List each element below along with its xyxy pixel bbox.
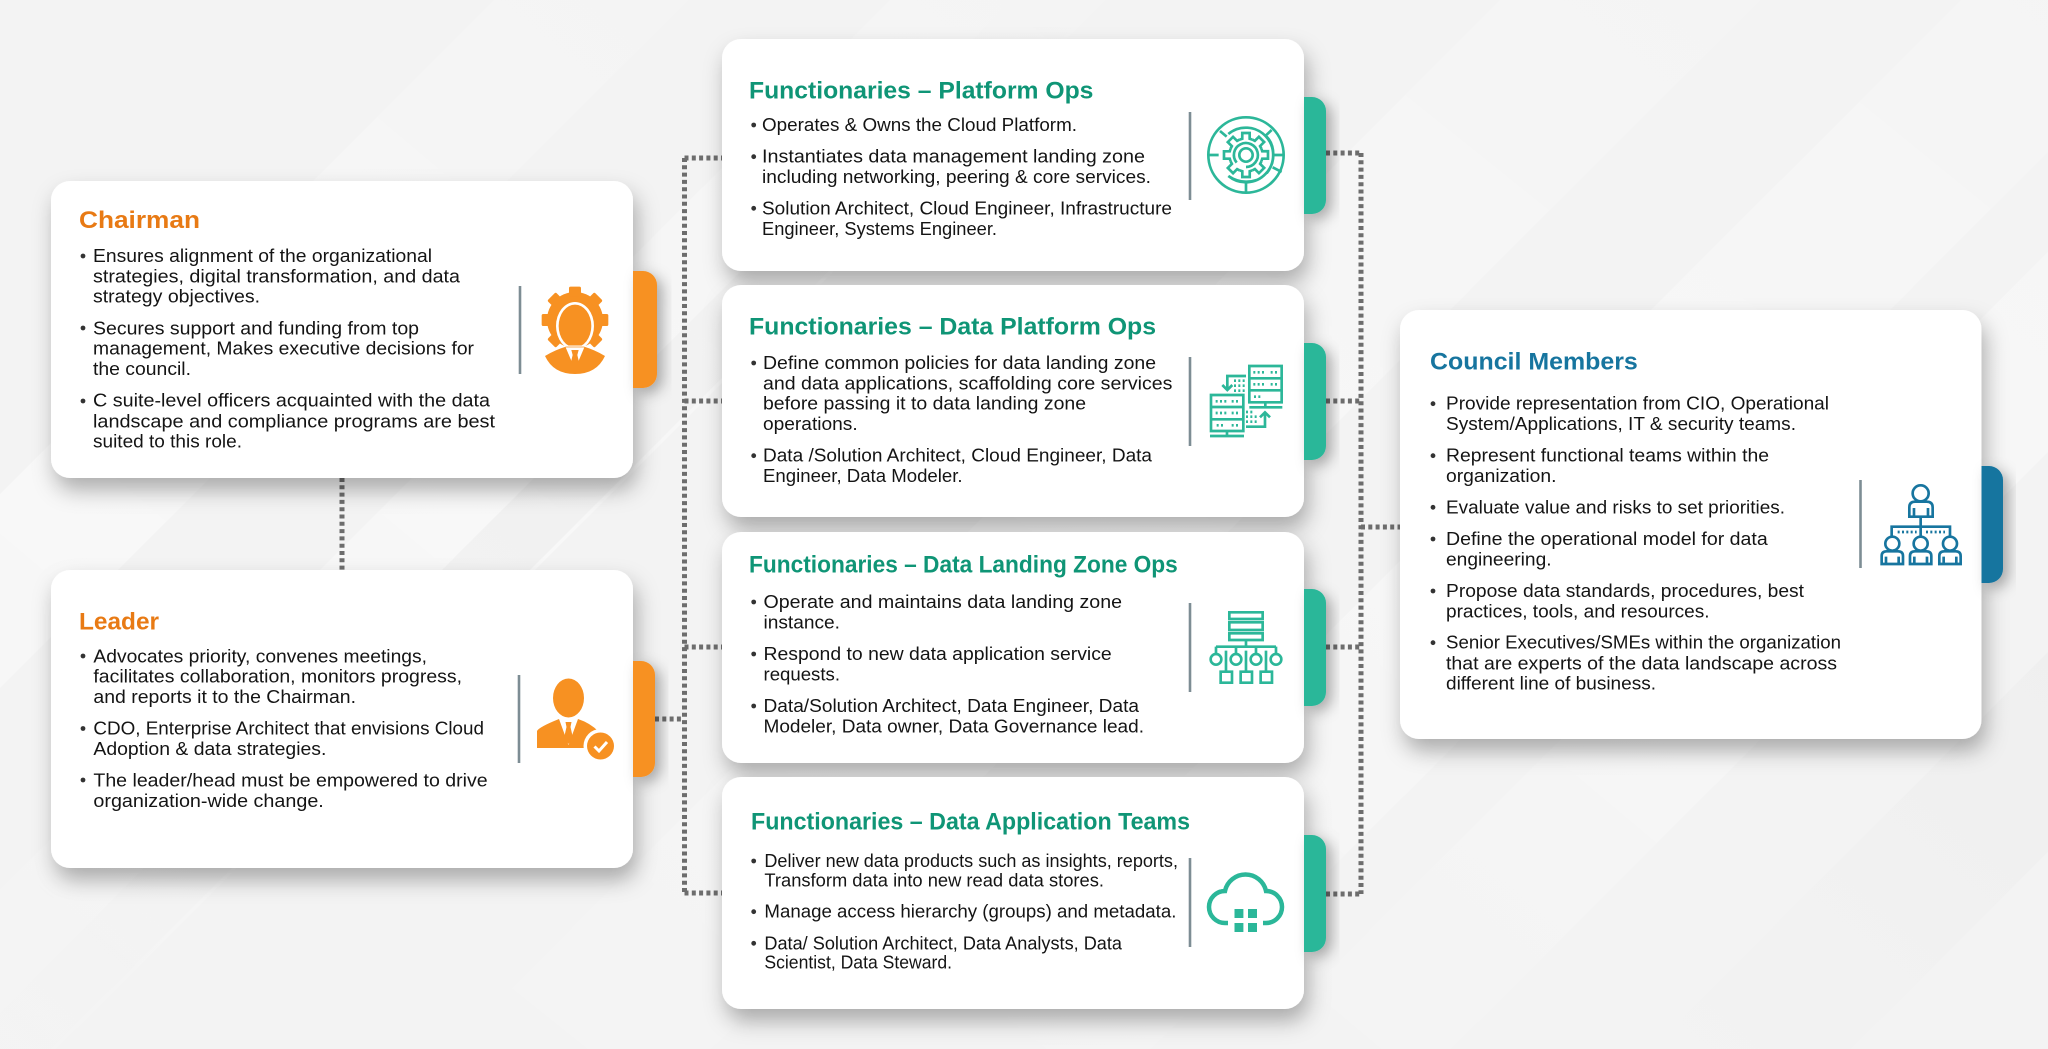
bullet list: Modeler, Data owner, Data Governance lead.	[764, 717, 1144, 737]
bullet list: Senior Executives/SMEs within the organization	[1446, 633, 1841, 653]
bullet list: Define the operational model for data	[1446, 529, 1769, 549]
icon: exchanging servers	[1210, 366, 1282, 436]
bullet list	[81, 246, 495, 451]
card background	[1400, 310, 1982, 739]
bullet list: Propose data standards, procedures, best	[1446, 581, 1804, 601]
bullet list: operations.	[763, 414, 858, 434]
bullet list: Manage access hierarchy (groups) and metadata.	[764, 902, 1176, 922]
bullet list: Operates & Owns the Cloud Platform.	[762, 115, 1077, 135]
bullet list: that are experts of the data landscape across	[1446, 653, 1837, 673]
panel: Functionaries Platform Ops	[722, 39, 1326, 271]
bullet list: strategy objectives.	[93, 287, 260, 307]
panel: Functionaries Data Landing Zone Ops	[722, 532, 1326, 763]
green tab	[1304, 343, 1326, 460]
card background	[51, 181, 633, 478]
bullet list: management, Makes executive decisions for	[93, 339, 474, 359]
blue tab	[1982, 466, 2003, 583]
icon: gear in ring	[1208, 117, 1284, 193]
bullet list: Evaluate value and risks to set priorities.	[1446, 497, 1785, 517]
divider	[1189, 603, 1191, 692]
bullet list: Instantiates data management landing zone	[762, 147, 1145, 167]
bullet list: Advocates priority, convenes meetings,	[93, 646, 427, 666]
bullet list	[751, 115, 1172, 239]
bullet list: requests.	[764, 664, 840, 684]
panel: Chairman	[51, 181, 657, 478]
panel: Functionaries Data Platform Ops	[722, 285, 1326, 517]
icon: verified leader	[537, 678, 618, 763]
bullet list: Adoption & data strategies.	[93, 739, 326, 759]
heading: Council Members	[1430, 349, 1638, 376]
bullet list: Scientist, Data Steward.	[764, 953, 952, 973]
bullet list: Represent functional teams within the	[1446, 446, 1769, 466]
dotted connectors	[342, 153, 1400, 894]
bullet list: Ensures alignment of the organizational	[93, 246, 432, 266]
heading: Functionaries – Data Platform Ops	[749, 313, 1156, 340]
bullet list: practices, tools, and resources.	[1446, 601, 1710, 621]
bullet list: engineering.	[1446, 549, 1552, 569]
bullet list: Define common policies for data landing zone	[763, 353, 1156, 373]
bullet list	[751, 851, 1178, 973]
divider	[1189, 858, 1191, 947]
bullet list	[81, 646, 488, 811]
card background	[722, 39, 1304, 271]
bullet list: suited to this role.	[93, 431, 242, 451]
bullet list: Provide representation from CIO, Operational	[1446, 394, 1829, 414]
bullet list	[1431, 394, 1841, 694]
bullet list: Operate and maintains data landing zone	[764, 592, 1122, 612]
bullet list: System/Applications, IT & security teams.	[1446, 414, 1796, 434]
panel: Functionaries Data Application Teams	[722, 777, 1326, 1009]
icon: executive with gear	[542, 287, 608, 374]
bullet list	[751, 353, 1172, 486]
orange tab	[633, 271, 657, 388]
bullet list: and data applications, scaffolding core services	[763, 373, 1172, 393]
divider	[518, 675, 520, 763]
bullet list: organization.	[1446, 466, 1556, 486]
bullet list: Deliver new data products such as insights, reports,	[764, 851, 1178, 871]
green tab	[1304, 97, 1326, 214]
card background	[722, 777, 1304, 1009]
green tab	[1304, 589, 1326, 706]
bullet list: Engineer, Systems Engineer.	[762, 219, 997, 239]
bullet list: Secures support and funding from top	[93, 318, 419, 338]
divider	[1189, 112, 1191, 200]
icon: data hierarchy	[1211, 612, 1281, 683]
card background	[722, 285, 1304, 517]
bullet list: C suite-level officers acquainted with the data	[93, 391, 491, 411]
green tab	[1304, 835, 1326, 952]
bullet list: landscape and compliance programs are best	[93, 411, 495, 431]
bullet list: Engineer, Data Modeler.	[763, 466, 963, 486]
bullet list: strategies, digital transformation, and data	[93, 266, 461, 286]
bullet list: organization-wide change.	[93, 791, 324, 811]
bullet list: The leader/head must be empowered to drive	[93, 770, 488, 790]
bullet list	[751, 592, 1144, 737]
bullet list: before passing it to data landing zone	[763, 394, 1086, 414]
bullet list: instance.	[764, 612, 840, 632]
heading: Leader	[79, 608, 159, 635]
icon: cloud with blocks	[1209, 875, 1282, 932]
orange tab	[633, 661, 655, 777]
bullet list: Data/ Solution Architect, Data Analysts, Data	[764, 933, 1123, 953]
bullet list: Transform data into new read data stores.	[764, 871, 1104, 891]
bullet list: and reports it to the Chairman.	[93, 687, 356, 707]
panel: Council Members	[1400, 310, 2003, 739]
heading: Functionaries – Data Application Teams	[751, 808, 1190, 835]
card background	[722, 532, 1304, 763]
bullet list: Data /Solution Architect, Cloud Engineer, Data	[763, 446, 1153, 466]
bullet list: Data/Solution Architect, Data Engineer, Data	[764, 696, 1140, 716]
heading: Functionaries – Data Landing Zone Ops	[749, 551, 1178, 578]
panel: Leader	[51, 570, 655, 868]
bullet list: Respond to new data application service	[764, 644, 1112, 664]
bullet list: CDO, Enterprise Architect that envisions Cloud	[93, 719, 484, 739]
bullet list: facilitates collaboration, monitors progress,	[93, 667, 462, 687]
divider	[1189, 357, 1191, 446]
heading: Functionaries – Platform Ops	[749, 77, 1093, 104]
divider	[1859, 480, 1862, 568]
bullet list: Solution Architect, Cloud Engineer, Infrastructure	[762, 198, 1172, 218]
bullet list: including networking, peering & core services.	[762, 167, 1151, 187]
card background	[51, 570, 633, 868]
heading: Chairman	[79, 207, 200, 234]
divider	[519, 286, 521, 374]
bullet list: different line of business.	[1446, 674, 1656, 694]
bullet list: the council.	[93, 359, 191, 379]
icon: organization chart	[1882, 485, 1961, 564]
